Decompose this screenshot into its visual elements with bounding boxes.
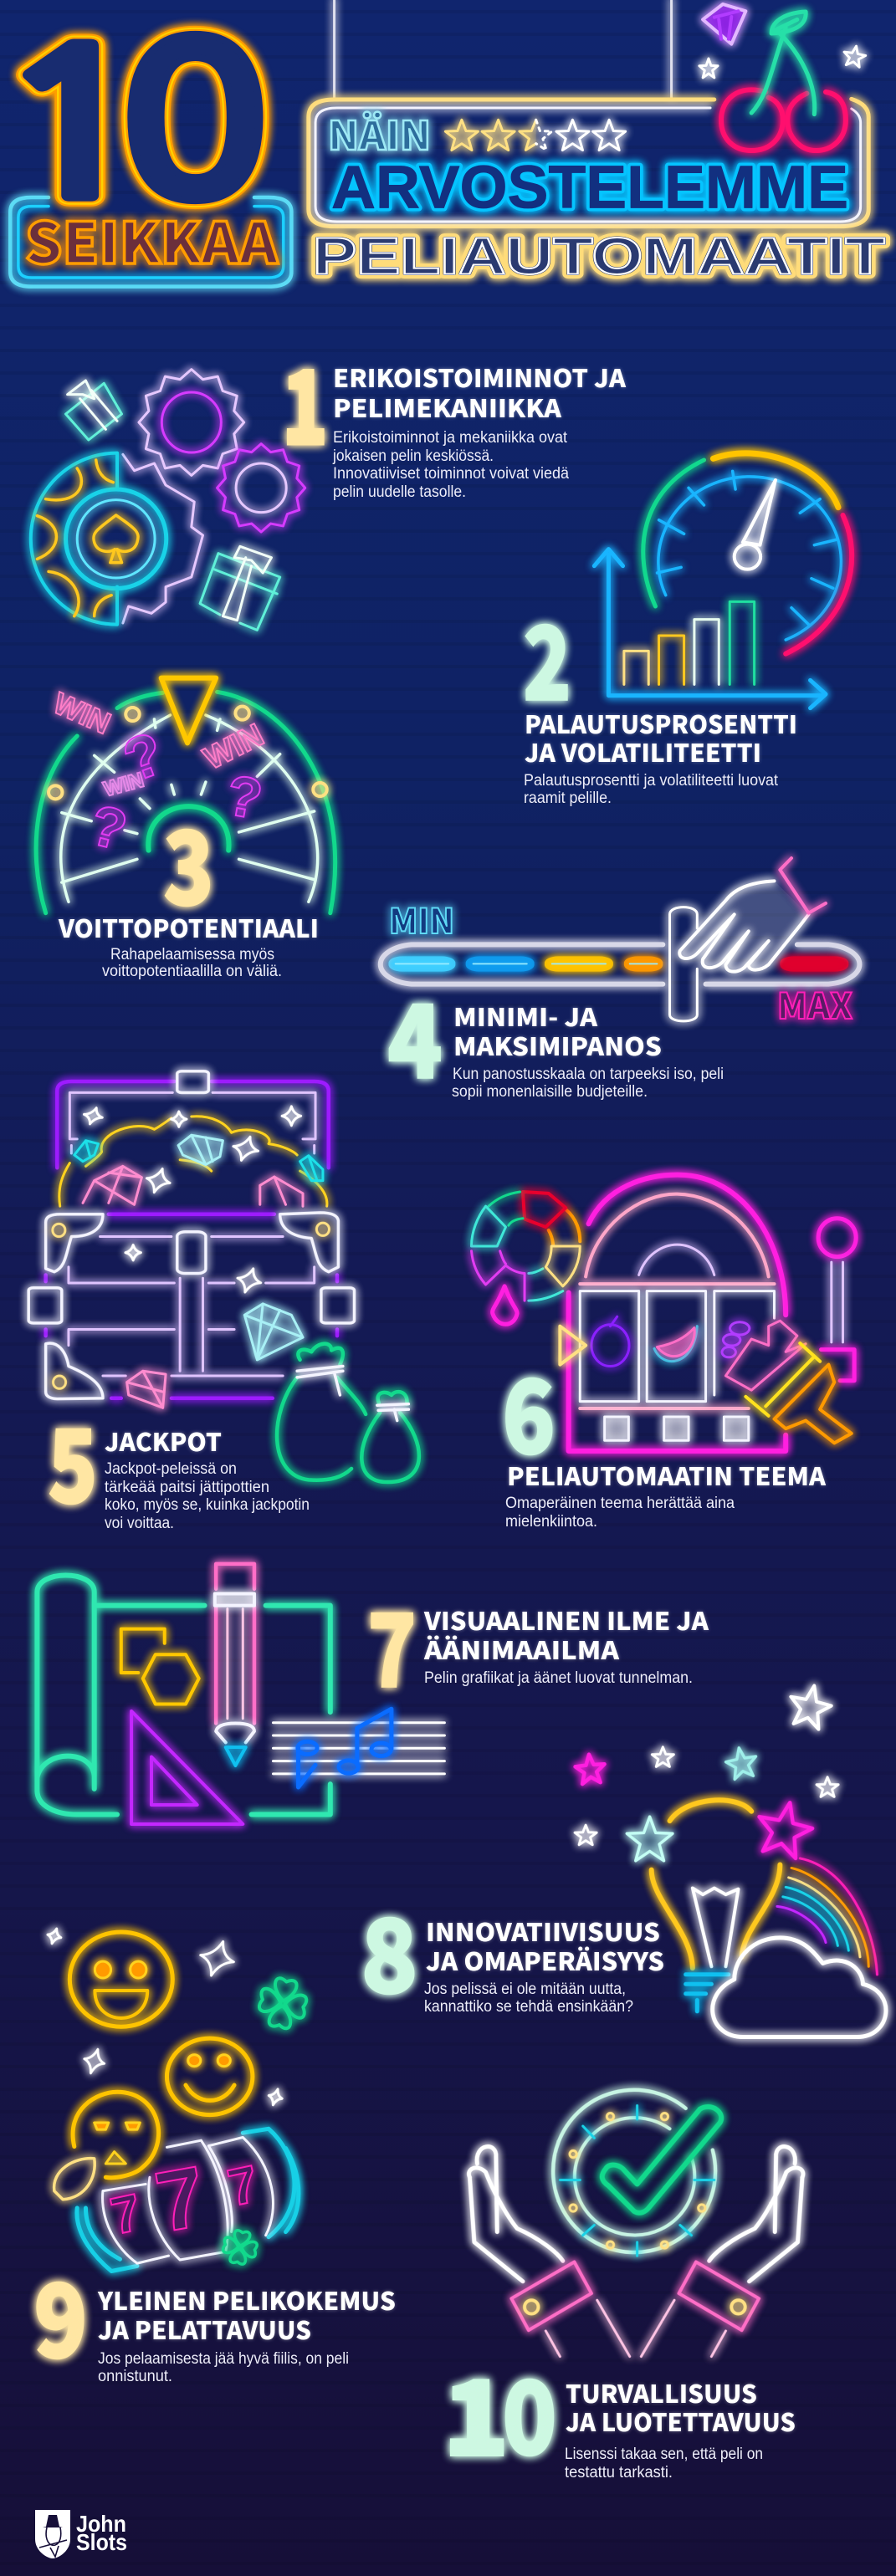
word ARVOSTELEMME: ARVOSTELEMME (331, 154, 848, 221)
big number 10: 0 (117, 18, 272, 232)
label MIN: MIN (389, 893, 454, 943)
WIN labels: WIN (49, 686, 115, 741)
logo: John Slots (35, 2510, 127, 2558)
body text (424, 1981, 633, 2016)
heading: PELIMEKANIIKKA (333, 390, 562, 425)
body text: koko, myös se, kuinka jackpotin (105, 1496, 310, 1514)
body text: Jackpot-peleissä on (105, 1460, 237, 1478)
logo: John Slots: John (76, 2511, 126, 2537)
heading: JA OMAPERÄISYYS (426, 1943, 664, 1978)
heading: TURVALLISUUS (566, 2375, 757, 2410)
heading: INNOVATIIVISUUS (426, 1914, 660, 1949)
body text (98, 2350, 349, 2385)
WIN labels (49, 686, 269, 801)
label MAX: MAX (777, 979, 852, 1030)
body text: jokaisen pelin keskiössä. (332, 447, 494, 465)
big number 10: 0 (117, 18, 272, 232)
body text: Innovatiiviset toiminnot voivat viedä (333, 465, 569, 483)
heading (333, 360, 627, 425)
heading: JA PELATTAVUUS (98, 2312, 311, 2347)
number 2: 2 (523, 582, 571, 730)
rating stars, cherry and diamond (445, 4, 867, 151)
body text: Erikoistoiminnot ja mekaniikka ovat (333, 429, 568, 447)
panel: 7 visuals and sound (37, 1564, 709, 1824)
body text: Rahapelaamisessa myös (110, 946, 274, 963)
word SEIKKAA: SEIKKAA (25, 197, 279, 280)
icon: slot machine, colour wheel and paint brush (472, 1175, 856, 1451)
icon: blueprint, pencil and music staff (37, 1564, 444, 1824)
number 5: 5 (48, 1385, 98, 1533)
icon: light bulb, stars, rainbow and cloud (575, 1681, 886, 2037)
panel: 2 payout and volatility (523, 453, 852, 807)
number 1: 1 (282, 326, 328, 474)
body text: Lisenssi takaa sen, että peli on (565, 2446, 763, 2463)
body text: voi voittaa. (105, 1515, 174, 1532)
heading: YLEINEN PELIKOKEMUS (97, 2282, 396, 2318)
body text: Palautusprosentti ja volatiliteetti luovat (524, 772, 779, 790)
heading: JA VOLATILITEETTI (525, 734, 761, 769)
body text: sopii monenlaisille budjeteille. (452, 1083, 648, 1101)
panel: 6 slot machine theme (472, 1175, 856, 1531)
panel: 4 min and max bet (381, 858, 859, 1108)
body text: raamit pelille. (524, 790, 612, 807)
heading: JACKPOT (105, 1423, 222, 1459)
reel sevens: 7 (223, 2155, 264, 2217)
body text: mielenkiintoa. (505, 1513, 597, 1531)
body text: Pelin grafiikat ja äänet luovat tunnelman. (424, 1669, 693, 1687)
number 4: 4 (387, 960, 443, 1108)
number 6: 6 (502, 1336, 556, 1484)
body text (105, 1460, 310, 1532)
body text (565, 2446, 763, 2481)
heading (97, 2282, 396, 2347)
number 9: 9 (33, 2240, 88, 2388)
question marks: ? (115, 719, 172, 795)
heading (453, 999, 662, 1063)
icon: gauge and bar chart (594, 453, 852, 708)
body text (332, 429, 569, 501)
number 3: 3 (163, 787, 214, 935)
panel: title (0, 0, 885, 287)
body text (524, 772, 779, 807)
word PELIAUTOMAATIT: PELIAUTOMAATIT (313, 227, 885, 286)
heading: PALAUTUSPROSENTTI (525, 706, 797, 741)
body text: pelin uudelle tasolle. (333, 483, 466, 501)
word PELIAUTOMAATIT: PELIAUTOMAATIT (313, 227, 885, 286)
body text: kannattiko se tehdä ensinkään? (424, 1998, 633, 2016)
number 10 (443, 2337, 557, 2485)
panel: 3 win potential (36, 678, 335, 980)
icon: happy face, sparkles and clover (45, 1927, 310, 2032)
heading: JA LUOTETTAVUUS (566, 2404, 796, 2439)
icon: prize wheel (36, 678, 335, 913)
question marks: ? (222, 763, 267, 831)
icon: treasure chest and money bags (28, 1071, 419, 1482)
number 10: 1 (443, 2337, 509, 2485)
hanging wires and sign frames (10, 0, 868, 287)
body text: Omaperäinen teema herättää aina (505, 1495, 735, 1512)
word PELIAUTOMAATIT: PELIAUTOMAATIT (313, 227, 885, 286)
heading: ÄÄNIMAAILMA (423, 1632, 620, 1667)
panel: 1 feature mechanics (31, 326, 627, 630)
body text (102, 946, 282, 980)
body text (452, 1066, 724, 1101)
word ARVOSTELEMME: ARVOSTELEMME (331, 154, 848, 221)
heading: ERIKOISTOIMINNOT JA (333, 360, 627, 395)
panel: 10 safety and trust (443, 2090, 803, 2485)
panel: 9 game experience (33, 1927, 396, 2388)
number 7: 7 (367, 1569, 417, 1717)
heading (423, 1602, 709, 1667)
icon: gears, chip and gifts (31, 370, 305, 630)
reel sevens (106, 2148, 264, 2251)
big number 10: 0 (117, 18, 272, 232)
body text: Jos pelaamisesta jää hyvä fiilis, on peli (98, 2350, 349, 2368)
word NÄIN: NÄIN (328, 104, 431, 161)
heading: VISUAALINEN ILME JA (423, 1602, 709, 1638)
panel: 5 jackpot (28, 1071, 419, 1533)
body text (505, 1495, 735, 1531)
body text: testattu tarkasti. (565, 2464, 673, 2481)
question marks (84, 719, 267, 863)
icon: bet slider with hand (381, 858, 859, 1021)
icon: smiling and grumpy faces, lemon and slot reels (54, 2038, 299, 2272)
body text: Jos pelissä ei ole mitään uutta, (424, 1981, 626, 1998)
body text: tärkeää paitsi jättipottien (105, 1479, 269, 1496)
reel sevens: 7 (149, 2148, 212, 2251)
WIN labels: WIN (101, 768, 146, 801)
body text: Kun panostusskaala on tarpeeksi iso, peli (453, 1066, 724, 1083)
reel sevens: 7 (106, 2184, 146, 2246)
heading (525, 706, 797, 769)
logo: John Slots: Slots (76, 2529, 127, 2555)
big number 10: 0 (117, 18, 272, 232)
panel: 8 innovation (361, 1681, 886, 2037)
heading (566, 2375, 796, 2439)
question marks: ? (84, 793, 133, 863)
heading (426, 1914, 664, 1978)
body text: voittopotentiaalilla on väliä. (102, 963, 282, 980)
heading: PELIAUTOMAATIN TEEMA (507, 1458, 827, 1493)
number 10: 0 (502, 2337, 557, 2485)
number 8: 8 (361, 1875, 418, 2023)
heading: VOITTOPOTENTIAALI (58, 910, 319, 945)
body text: onnistunut. (98, 2368, 172, 2385)
heading: MAKSIMIPANOS (453, 1028, 662, 1063)
big number 10 (0, 18, 272, 232)
WIN labels: WIN (198, 718, 269, 777)
heading: MINIMI- JA (453, 999, 598, 1034)
icon: hands holding a checkmark badge (468, 2090, 803, 2357)
